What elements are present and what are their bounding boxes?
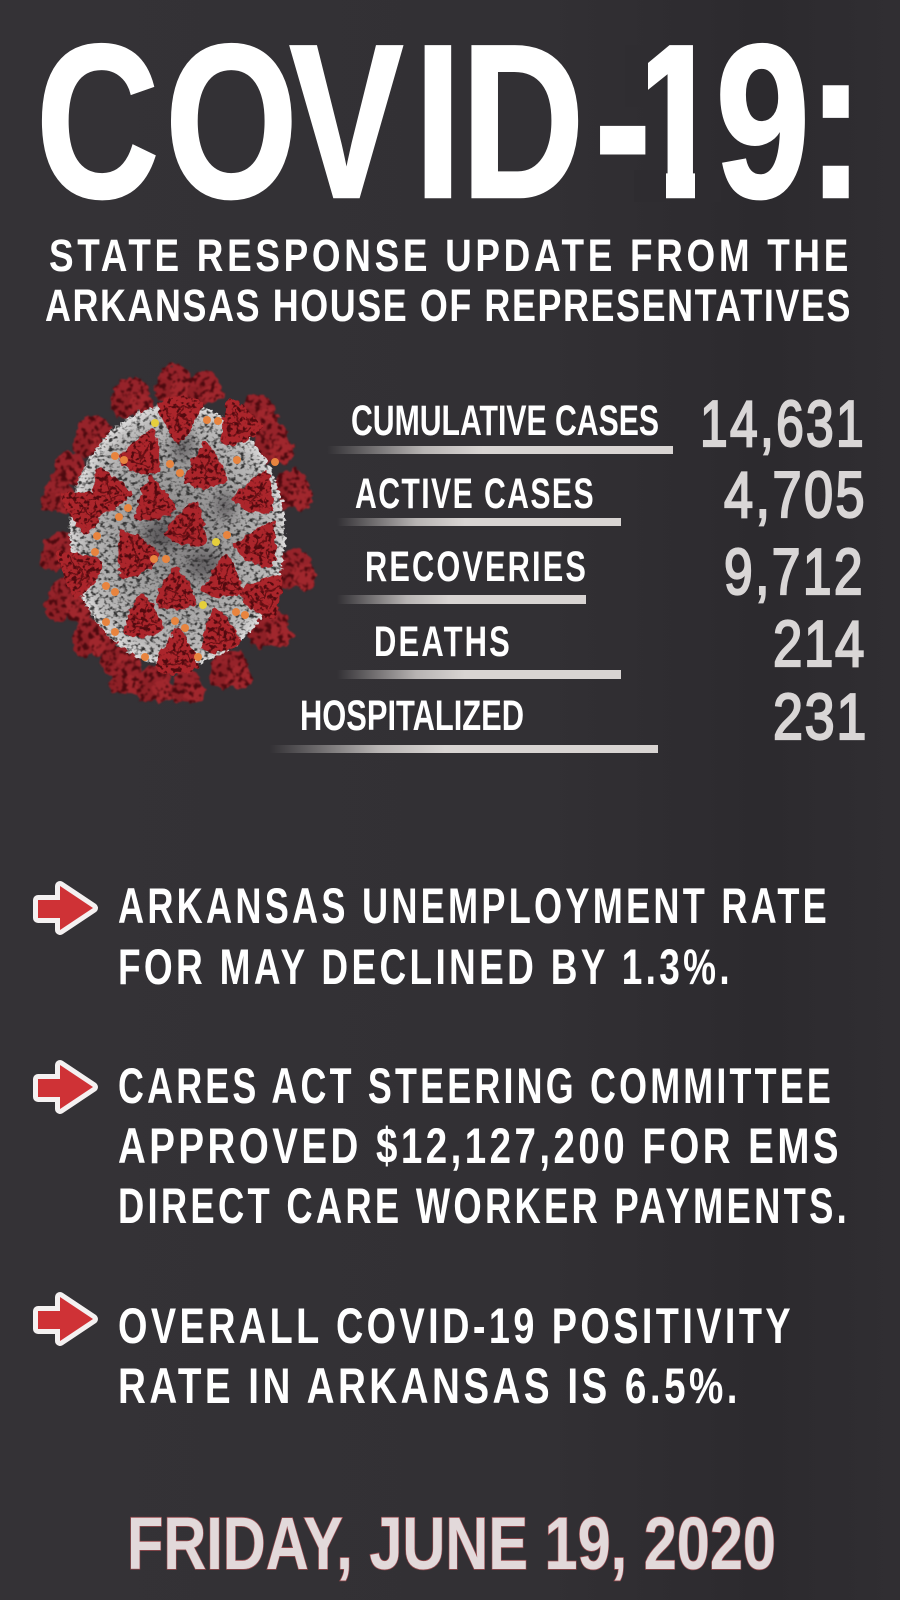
icon: red arrow xyxy=(38,1297,93,1341)
stat row: deaths xyxy=(337,607,866,680)
icon: coronavirus particle xyxy=(40,364,316,703)
stat row: hospitalized xyxy=(270,680,868,753)
bullet: unemployment rate xyxy=(38,878,830,995)
bullet: CARES Act funding xyxy=(38,1058,850,1234)
stat row: cumulative cases xyxy=(327,387,866,460)
stat row: recoveries xyxy=(337,535,865,608)
stat row: hospitalized: HOSPITALIZED xyxy=(300,692,524,740)
icon: red arrow xyxy=(38,886,93,930)
stat row: recoveries: 9,712 xyxy=(724,535,865,608)
stat row: deaths: DEATHS xyxy=(374,618,512,666)
stat row: deaths: 214 xyxy=(773,607,866,680)
title: COVID-19: xyxy=(36,0,864,244)
stat row: active cases: 4,705 xyxy=(724,458,867,531)
stat row: active cases: ACTIVE CASES xyxy=(355,470,595,518)
icon: red arrow xyxy=(38,1065,93,1109)
subtitle xyxy=(45,230,852,331)
stat row: active cases xyxy=(337,458,867,531)
bullet: positivity rate xyxy=(38,1297,794,1414)
stat row: recoveries: RECOVERIES xyxy=(365,543,588,591)
stat row: hospitalized: 231 xyxy=(773,680,868,753)
stat row: cumulative cases: CUMULATIVE CASES xyxy=(351,397,659,445)
